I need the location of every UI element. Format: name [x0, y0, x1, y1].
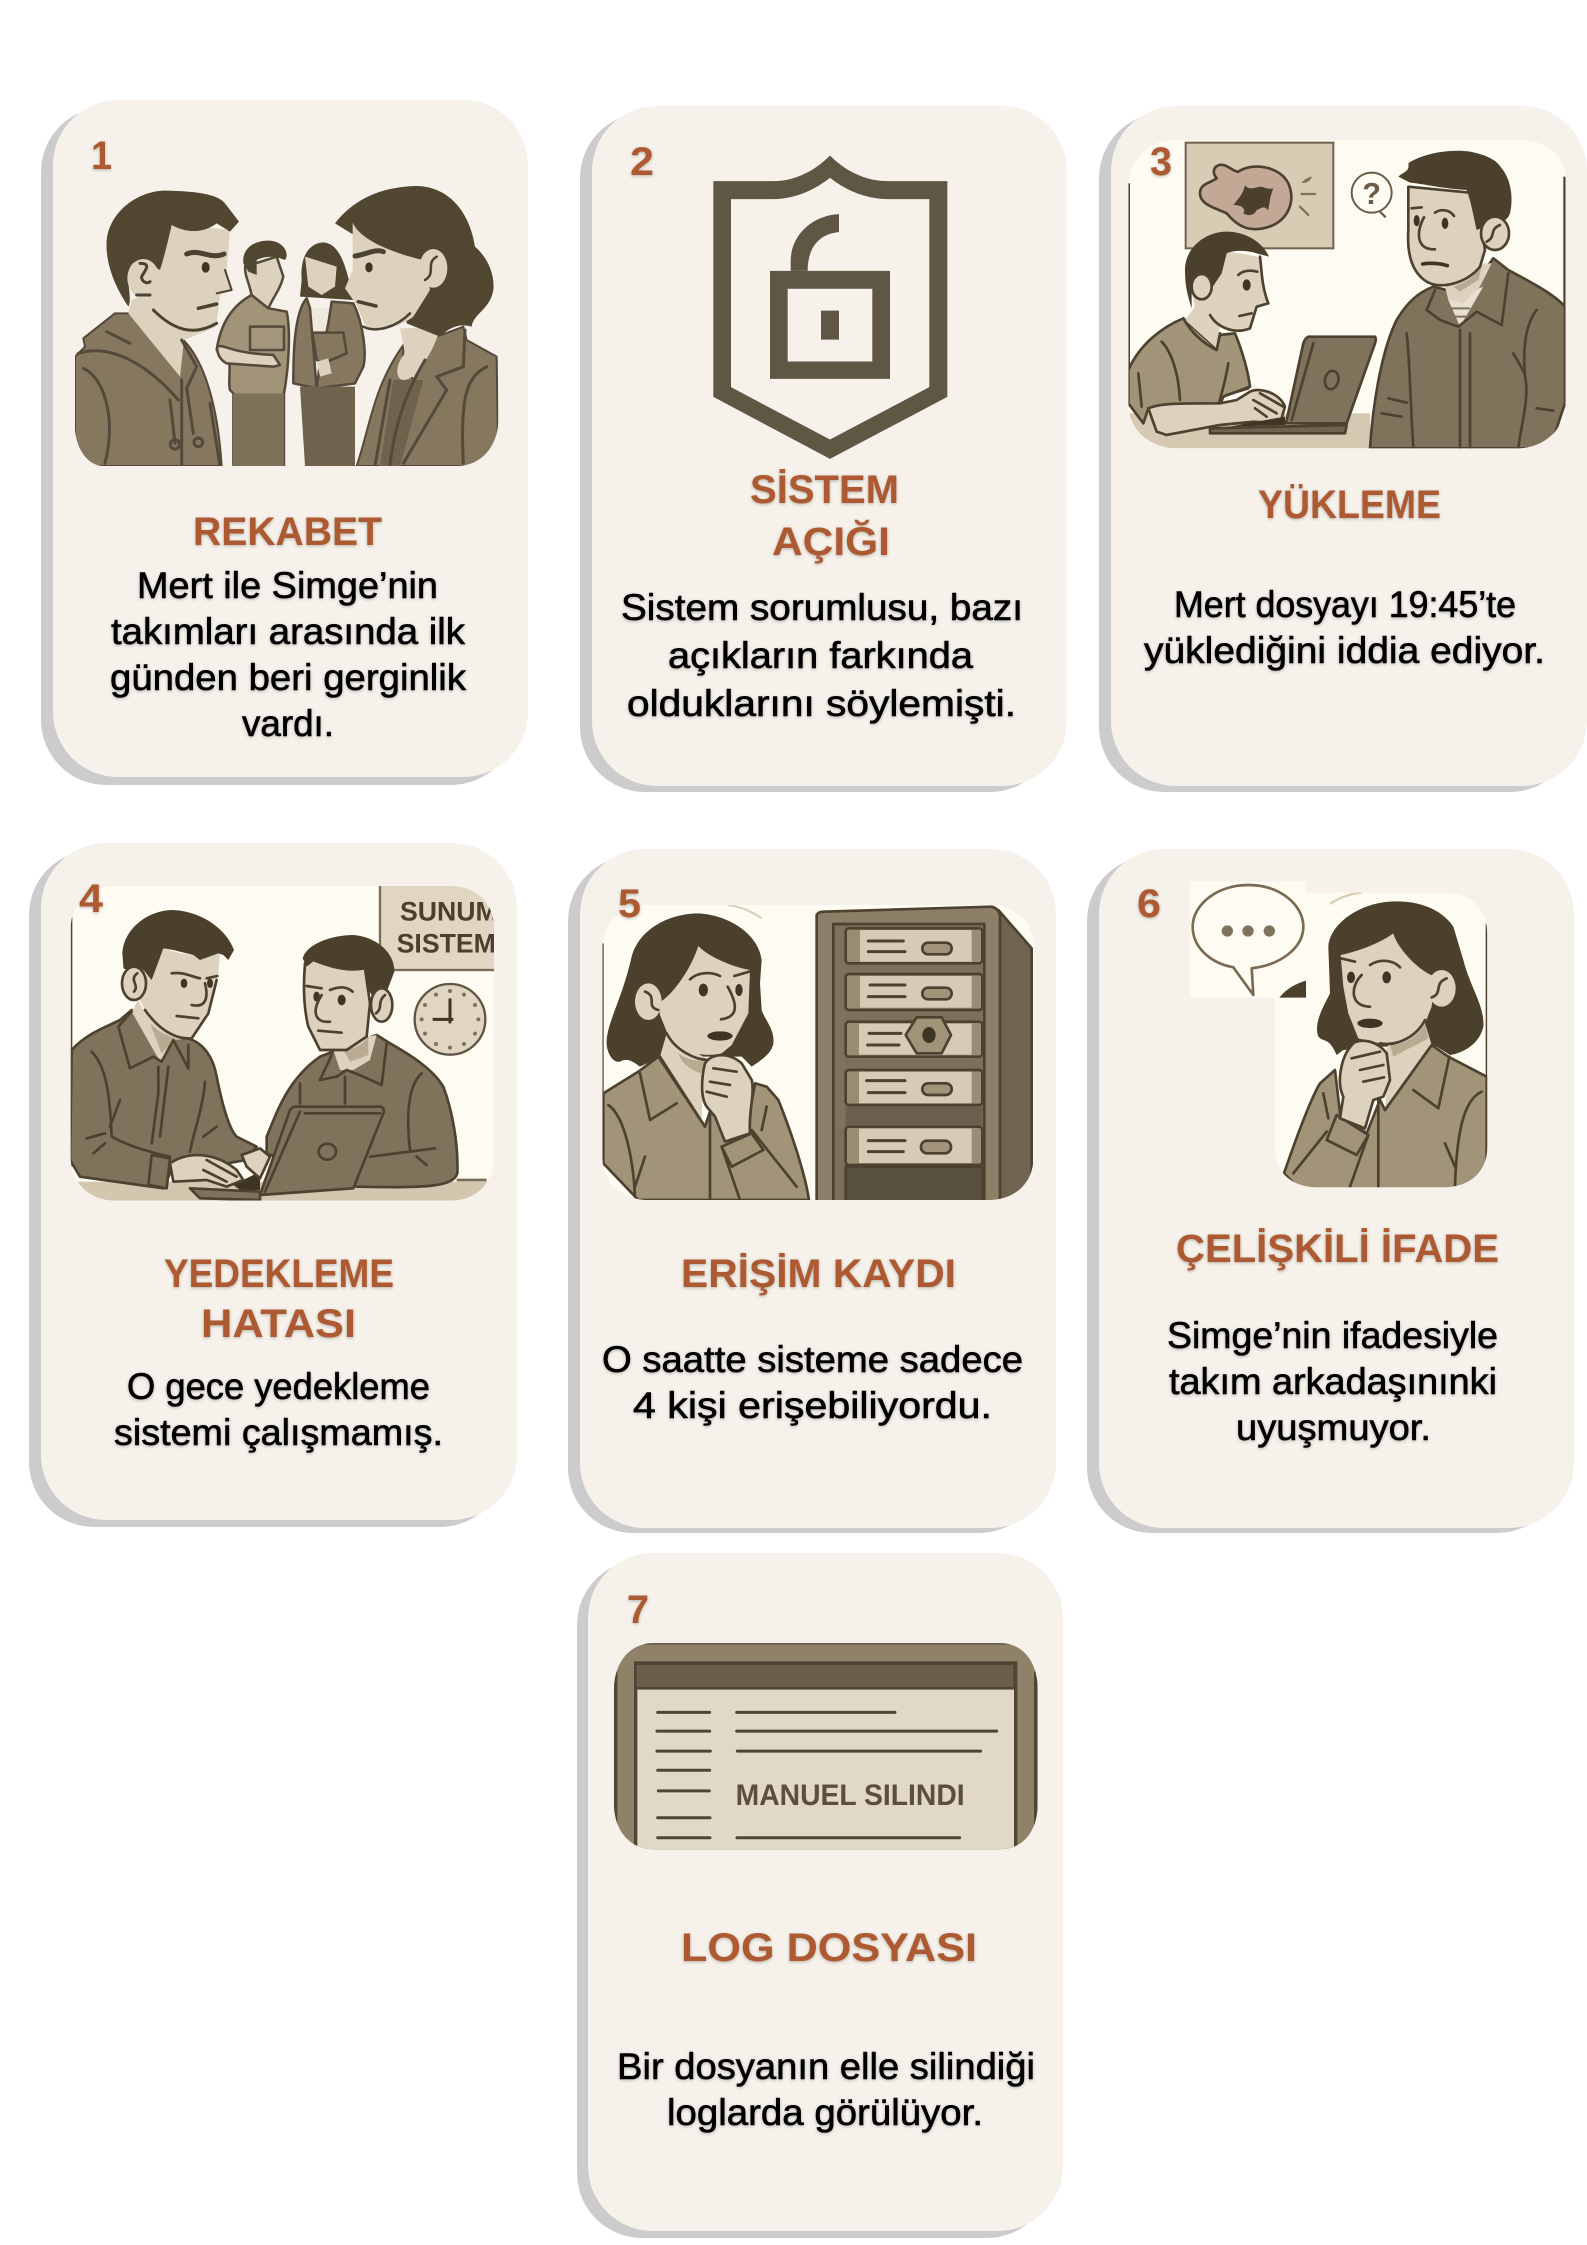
body text: card 1: takımları arasında ilk [111, 611, 466, 652]
right woman body [357, 327, 498, 466]
illustration: woman thinking beside server rack [602, 903, 1035, 1202]
body text: card 2: açıkların farkında [668, 635, 973, 676]
number 3: 3 [1150, 140, 1172, 184]
server rack [998, 910, 1032, 1202]
body text: card 3: yüklediğini iddia ediyor. [1144, 630, 1545, 671]
body text: card 4: O gece yedekleme [127, 1366, 430, 1407]
number 4: 4 [79, 877, 104, 921]
panel: card 7 log dosyası [577, 1553, 1063, 2238]
question bubble [1352, 173, 1392, 213]
body text: card 1: günden beri gerginlik [110, 657, 467, 698]
illustration: man uploading at laptop, colleague questioning [1127, 138, 1568, 450]
table [1128, 413, 1370, 448]
left man body [75, 313, 222, 466]
illustration: log window with manual deletion entry: MANUEL SILINDI [736, 1779, 965, 1812]
heading: sistem açığı [750, 468, 899, 564]
right man [267, 1035, 457, 1187]
body text: card 6 [1167, 1315, 1498, 1448]
left man [70, 1010, 257, 1188]
illustration: log window with manual deletion entry [613, 1642, 1038, 1851]
number 1: 1 [91, 134, 112, 178]
laptop [1210, 425, 1347, 433]
body text: card 7 [617, 2046, 1035, 2133]
body text: card 2 [621, 587, 1023, 724]
panel: card 4 yedekleme hatası [29, 843, 517, 1527]
body text: card 3 [1144, 584, 1545, 671]
illustration: man uploading at laptop, colleague questioning: ? [1362, 177, 1381, 211]
body text: card 7: Bir dosyanın elle silindiği [617, 2046, 1035, 2087]
hair [1317, 901, 1483, 1055]
body text: card 6: Simge’nin ifadesiyle [1167, 1315, 1498, 1356]
heading: log dosyası: LOG DOSYASI [681, 1926, 977, 1970]
shirt [1284, 1045, 1487, 1190]
body text: card 4: sistemi çalışmamış. [114, 1412, 443, 1453]
back man [217, 295, 289, 466]
wall picture [1186, 143, 1333, 248]
back woman [300, 242, 353, 300]
body text: card 3: Mert dosyayı 19:45’te [1174, 584, 1516, 625]
illustration: rival colleagues facing each other [75, 186, 498, 466]
heading: yedekleme hatası [164, 1252, 394, 1346]
illustration: two men checking the laptop: SISTEMİ [397, 929, 503, 959]
table [71, 1182, 494, 1202]
sign [380, 883, 500, 970]
heading: erişim kaydı: ERİŞİM KAYDI [681, 1252, 956, 1296]
body text: card 7: loglarda görülüyor. [667, 2092, 983, 2133]
body text: card 6: takım arkadaşınınki [1169, 1361, 1497, 1402]
body text: card 1 [110, 565, 467, 744]
body text: card 2: olduklarını söylemişti. [627, 683, 1016, 724]
standing man [1370, 258, 1565, 448]
heading: yedekleme hatası: YEDEKLEME [164, 1252, 394, 1296]
seated man [1128, 318, 1250, 423]
illustration: two men checking the laptop [70, 883, 503, 1202]
hand [1340, 1041, 1390, 1128]
body text: card 5: 4 kişi erişebiliyordu. [633, 1385, 992, 1426]
right woman head [335, 186, 494, 337]
number 7: 7 [627, 1588, 649, 1632]
heading: yükleme: YÜKLEME [1258, 482, 1441, 527]
number 6: 6 [1137, 882, 1161, 926]
number 5: 5 [618, 882, 641, 926]
heading: sistem açığı: SİSTEM [750, 468, 899, 512]
panel: card 2 sistem açığı [580, 106, 1067, 792]
clock [415, 984, 485, 1055]
body text: card 5 [602, 1339, 1023, 1426]
panel: card 6 çelişkili ifade [1087, 849, 1574, 1533]
heading: yedekleme hatası: HATASI [201, 1302, 356, 1346]
body text: card 5: O saatte sisteme sadece [602, 1339, 1023, 1380]
heading: sistem açığı: AÇIĞI [772, 518, 890, 564]
body text: card 2: Sistem sorumlusu, bazı [621, 587, 1023, 628]
body text: card 4 [114, 1366, 443, 1453]
body text: card 6: uyuşmuyor. [1236, 1407, 1431, 1448]
number 2: 2 [630, 140, 654, 184]
illustration: woman with speech bubble [1190, 882, 1490, 1190]
left man head [154, 225, 230, 325]
illustration: two men checking the laptop: SUNUM [400, 897, 498, 927]
laptop [190, 1188, 260, 1200]
icon: shield with open padlock [713, 155, 947, 459]
body text: card 1: vardı. [242, 703, 334, 744]
woman [603, 1057, 809, 1200]
body text: card 1: Mert ile Simge’nin [137, 565, 438, 606]
panel: card 5 erişim kaydı [568, 849, 1056, 1533]
panel: card 1 rekabet [41, 100, 528, 785]
panel: card 3 yükleme [1099, 106, 1587, 792]
heading: çelişkili ifade: ÇELİŞKİLİ İFADE [1176, 1227, 1499, 1271]
heading: rekabet: REKABET [193, 510, 382, 554]
